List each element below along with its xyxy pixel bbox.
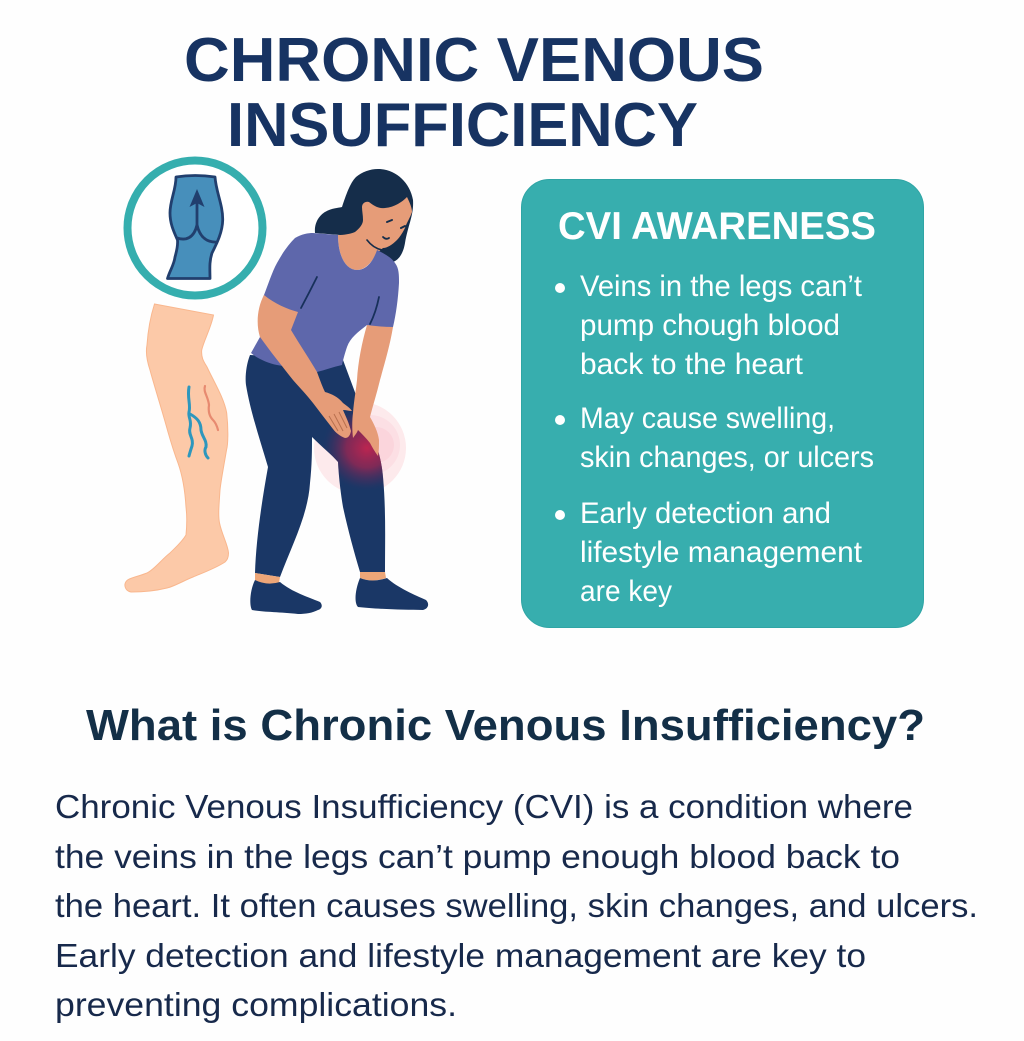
right arm [352,325,393,456]
bullet: management: lifestyle management [580,536,862,569]
red vein [205,386,218,430]
bullet: management [555,497,862,608]
trousers [246,355,385,577]
panel heading: CVI AWARENESS [558,205,876,248]
bullet: symptoms: skin changes, or ulcers [580,441,874,474]
bullet: symptoms: May cause swelling, [580,402,835,435]
bullet: pumping [555,270,862,381]
left arm and hand [258,295,352,438]
description paragraph: Chronic Venous Insufficiency (CVI) is a condition where [55,788,913,825]
shirt folds [301,277,379,324]
neck and face [338,197,412,270]
bullet: pumping: back to the heart [580,348,803,381]
bullet: management: are key [580,575,672,608]
icon: leg with varicose veins [125,304,228,592]
description paragraph: the heart. It often causes swelling, skin changes, and ulcers. [55,887,978,924]
ankles [255,573,280,584]
facial features [367,220,405,250]
title: CHRONIC VENOUS [184,26,764,95]
bullet: pumping: pump chough blood [580,309,840,342]
description paragraph [55,788,978,1023]
panel: CVI awareness [522,180,924,628]
hair [315,169,413,262]
description paragraph: the veins in the legs can’t pump enough blood back to [55,838,900,875]
title [184,26,764,160]
knee glow [314,402,406,494]
shirt [251,233,399,372]
section heading: What is Chronic Venous Insufficiency? [86,701,925,750]
bullet: pumping: Veins in the legs can’t [580,270,862,303]
right foot [356,578,428,610]
description paragraph: preventing complications. [55,986,457,1023]
left foot [250,580,322,614]
bullet: symptoms [555,402,874,474]
bullet: management: Early detection and [580,497,831,530]
finger lines [329,412,347,431]
title: INSUFFICIENCY [227,91,698,160]
knee pain highlight [327,412,384,486]
description paragraph: Early detection and lifestyle management are key to [55,937,866,974]
blue veins [188,387,208,458]
illustration: woman holding knee [246,169,428,614]
icon: vein valve in circle [128,160,262,296]
